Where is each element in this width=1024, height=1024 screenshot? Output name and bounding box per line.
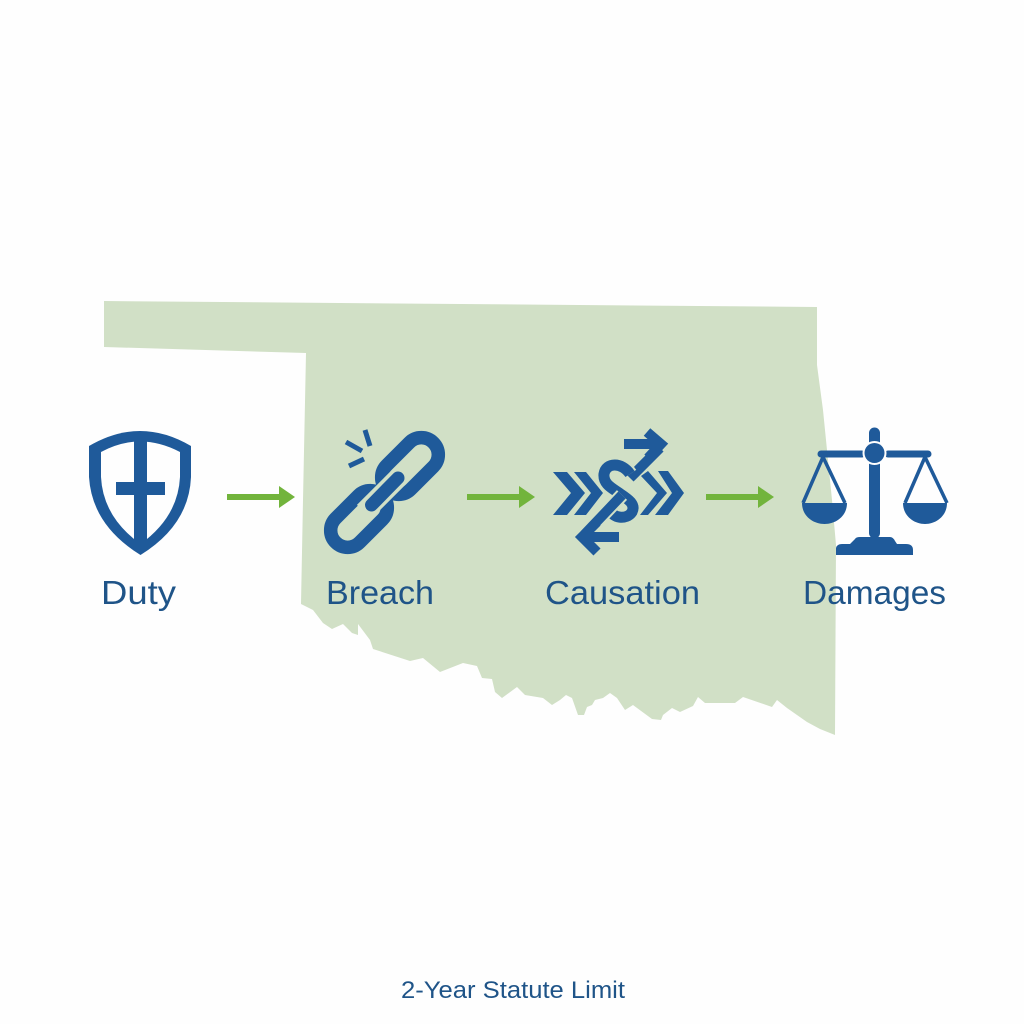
icon: interlinked arrows (Causation): [553, 432, 684, 552]
footer note: statute limit: 2-Year Statute Limit: [401, 977, 625, 1004]
arrow: Duty to Breach: [227, 486, 295, 508]
label: Duty: Duty: [101, 574, 177, 611]
icon: balance scales (Damages): [802, 433, 947, 555]
label: Breach: Breach: [326, 574, 434, 611]
arrow: Causation to Damages: [706, 486, 774, 508]
map: Oklahoma silhouette: [104, 301, 836, 735]
label: Causation: Causation: [545, 574, 700, 611]
icon: broken chain link (Breach): [324, 430, 445, 554]
icon: shield (Duty): [89, 431, 191, 555]
label: Damages: Damages: [803, 574, 946, 611]
arrow: Breach to Causation: [467, 486, 535, 508]
